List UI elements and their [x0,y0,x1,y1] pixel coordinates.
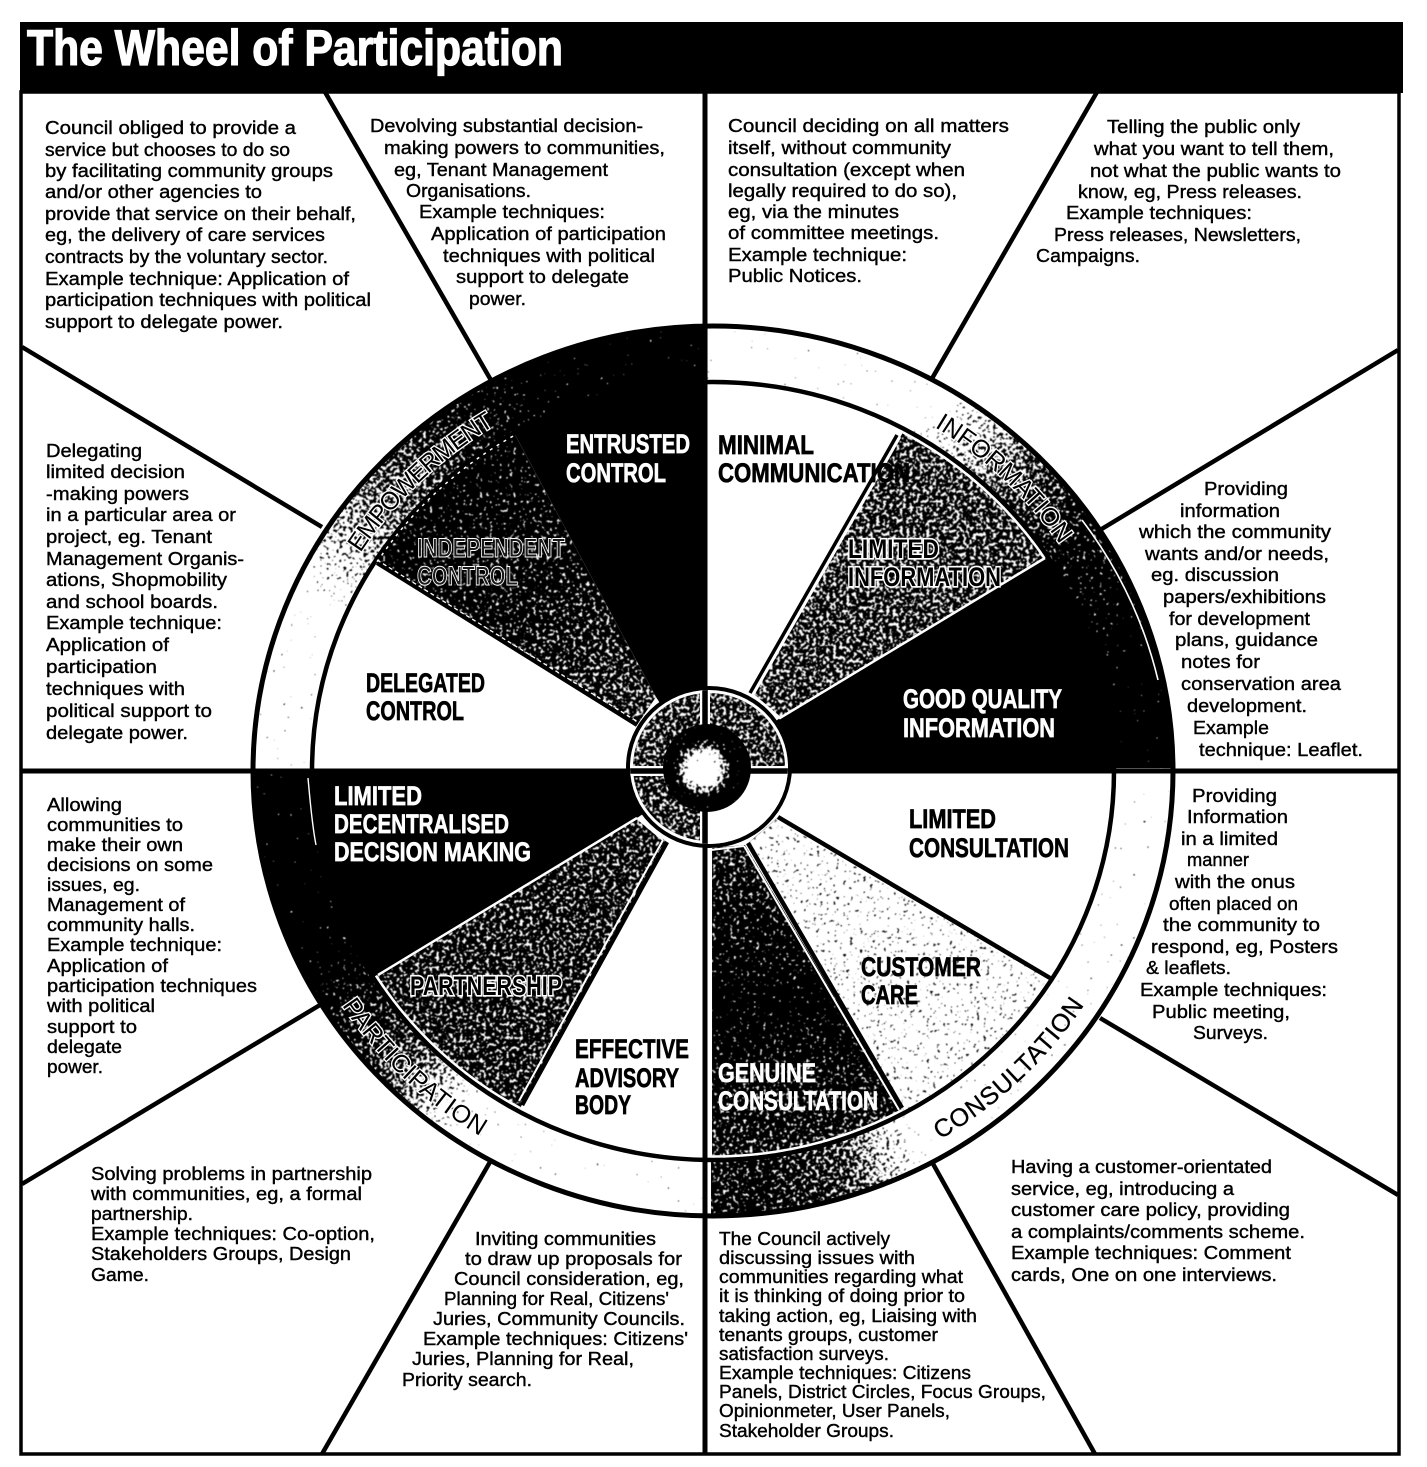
text block: customer-orientated service [1011,1156,1305,1285]
text block: providing information: eg. discussion [1151,564,1279,585]
label: entrusted control: ENTRUSTED [566,429,690,459]
text block: allowing communities [46,794,257,1077]
text block: providing information: plans, guidance [1175,629,1318,650]
text block: devolving substantial powers: making powers to communities, [384,137,665,158]
label: limited consultation: LIMITED [909,804,996,834]
text block: providing information in a limited manner: Example techniques: [1140,979,1327,1000]
text block: delegating limited powers: limited decision [46,461,185,482]
label: limited consultation [909,804,1069,863]
text block: providing information in a limited manner: in a limited [1181,828,1278,849]
text block: providing information [1138,478,1363,760]
text block: providing information: development. [1187,695,1307,716]
text block: solving problems: Solving problems in partnership [91,1163,372,1184]
label: good quality information: GOOD QUALITY [903,684,1062,714]
text block: solving problems: Stakeholders Groups, Design [91,1243,351,1264]
text block: devolving substantial powers: power. [469,288,526,309]
wedge: genuine consultation [712,845,903,1158]
ring: empowerment shading [240,310,705,771]
text block: customer-orientated service: Example techniques: Comment [1011,1242,1291,1263]
label: delegated control: DELEGATED [366,668,485,698]
wedge: good quality information [776,558,1112,768]
text block: delegating limited powers: political support to [46,700,212,721]
text block: council obliged: Example technique: Application of [45,268,350,289]
text block: devolving substantial powers: Example techniques: [419,201,605,222]
label: limited information [848,534,1001,592]
text block: council obliged: contracts by the voluntary sector. [45,246,328,267]
label: effective advisory body: BODY [575,1090,631,1120]
text block: council obliged: and/or other agencies to [45,181,262,202]
text block: telling the public: what you want to tell them, [1093,138,1334,159]
label: limited consultation: CONSULTATION [909,833,1069,863]
text block: devolving substantial powers: Organisations. [406,180,531,201]
text block: devolving substantial powers [370,115,666,309]
label: genuine consultation: GENUINE [718,1058,816,1088]
label: customer care [861,952,981,1010]
text block: telling the public [1036,116,1341,266]
label: delegated control [366,668,485,726]
text block: providing information in a limited manner: manner [1187,849,1249,870]
text block: council deciding: Public Notices. [728,265,862,286]
text block: devolving substantial powers: techniques with political [443,245,655,266]
text block: providing information: which the community [1138,521,1332,542]
text block: providing information in a limited manner: & leaflets. [1146,957,1231,978]
wedge: limited decentralised decision making [314,774,642,976]
text block: inviting communities: Planning for Real, Citizens' [444,1288,669,1309]
text block: council obliged: eg, the delivery of care services [45,224,325,245]
label: good quality information: INFORMATION [903,713,1055,743]
label: minimal communication: COMMUNICATION [718,458,910,488]
text block: allowing communities: with political [46,995,155,1016]
wedge: independent control [376,435,656,725]
text block: providing information: papers/exhibitions [1163,586,1326,607]
label: genuine consultation: CONSULTATION [718,1086,878,1116]
text block: telling the public: know, eg, Press releases. [1078,181,1302,202]
label: limited decentralised decision making: DECENTRALISED [334,809,509,839]
wedge labels [334,429,1069,1120]
text block: council actively discussing [719,1228,1046,1441]
text block: allowing communities: make their own [47,834,183,855]
text block: council actively discussing: it is thinking of doing prior to [719,1285,965,1306]
text block: allowing communities: issues, eg. [47,874,140,895]
text block: customer-orientated service: a complaints/comments scheme. [1011,1221,1305,1242]
text block: inviting communities: Juries, Community Councils. [433,1308,685,1329]
label: independent control: INDEPENDENT [417,533,565,563]
wheel diagram [250,324,1176,1218]
text block: telling the public: Example techniques: [1066,202,1252,223]
text block: council deciding: of committee meetings. [728,222,939,243]
text block: providing information: conservation area [1181,673,1342,694]
text block: customer-orientated service: customer care policy, providing [1011,1199,1290,1220]
label: entrusted control: CONTROL [566,458,666,488]
wheel outlines [253,326,1173,1216]
text block: inviting communities: Example techniques: Citizens' [423,1328,688,1349]
label: limited decentralised decision making: LIMITED [334,781,422,811]
label: customer care: CARE [861,980,918,1010]
ring label: empowerment: EMPOWERMENT [346,409,491,552]
ring label: consultation: CONSULTATION [934,996,1084,1136]
text block: telling the public: Press releases, Newsletters, [1054,224,1301,245]
text block: allowing communities: Application of [47,955,169,976]
label: limited decentralised decision making [334,781,531,867]
label: partnership: PARTNERSHIP [410,971,562,1001]
text block: council deciding: eg, via the minutes [728,201,899,222]
wedge: customer care [748,817,1044,1111]
text block: council obliged: support to delegate power. [45,311,283,332]
text block: providing information in a limited manner: Public meeting, [1152,1001,1290,1022]
text block: devolving substantial powers: Devolving substantial decision- [370,115,643,136]
text block: allowing communities: participation techniques [47,975,257,996]
text block: council actively discussing: Example techniques: Citizens [719,1362,971,1383]
label: limited decentralised decision making: DECISION MAKING [334,837,531,867]
wedge: limited information [754,431,1046,716]
text block: allowing communities: communities to [47,814,183,835]
text block: customer-orientated service: cards, One on one interviews. [1011,1264,1277,1285]
text block: inviting communities: Priority search. [402,1369,532,1390]
text block: council actively discussing: Stakeholder Groups. [719,1420,894,1441]
ring: participation shading [240,771,705,1231]
label: limited information: INFORMATION [848,562,1001,592]
title: The Wheel of Participation [27,20,563,76]
text block: council deciding: Council deciding on all matters [728,115,1009,136]
text block: inviting communities: Juries, Planning for Real, [412,1348,634,1369]
text block: council obliged: service but chooses to do so [45,139,290,160]
text block: allowing communities: decisions on some [47,854,213,875]
text block: delegating limited powers: Delegating [46,440,142,461]
text block: inviting communities: to draw up proposals for [465,1248,682,1269]
text block: council actively discussing: The Council actively [719,1228,891,1249]
text block: delegating limited powers: participation [46,656,157,677]
text block: council actively discussing: communities regarding what [719,1266,963,1287]
text block: telling the public: Campaigns. [1036,245,1140,266]
text block: delegating limited powers: -making powers [46,483,189,504]
text block: council deciding [728,115,1009,286]
text block: council actively discussing: taking action, eg, Liaising with [719,1305,977,1326]
text block: devolving substantial powers: support to delegate [456,266,629,287]
ring: information shading [707,310,1187,771]
ring label: participation: PARTICIPATION [341,995,488,1136]
label: entrusted control [566,429,690,488]
label: effective advisory body [575,1034,689,1120]
text block: council deciding: Example technique: [728,244,907,265]
text block: council obliged: by facilitating community groups [45,160,333,181]
text block: providing information in a limited manner: Providing [1192,785,1277,806]
title bar [20,20,1403,93]
ring: consultation shading [711,768,1187,1231]
text block: providing information: technique: Leaflet. [1199,739,1363,760]
text block: delegating limited powers: in a particular area or [46,504,236,525]
text block: allowing communities: Management of [47,894,186,915]
label: limited information: LIMITED [848,534,939,564]
ring labels [341,409,1084,1136]
text block: council obliged: participation techniques with political [45,289,371,310]
text block: providing information: Example [1193,717,1269,738]
wedge: entrusted control [515,384,702,702]
text block: providing information: information [1180,500,1280,521]
text block: solving problems: with communities, eg, a formal [90,1183,362,1204]
text block: telling the public: Telling the public only [1107,116,1301,137]
text block: council obliged [45,117,371,332]
text block: customer-orientated service: Having a customer-orientated [1011,1156,1272,1177]
text block: allowing communities: delegate [47,1036,122,1057]
text block: delegating limited powers: delegate power. [46,722,188,743]
label: effective advisory body: ADVISORY [575,1063,679,1093]
label: minimal communication [718,430,910,488]
text block: providing information: for development [1169,608,1310,629]
text block: delegating limited powers: techniques with [46,678,185,699]
text block: providing information in a limited manner: Surveys. [1193,1022,1268,1043]
label: genuine consultation [718,1058,878,1116]
text block: providing information: wants and/or needs, [1144,543,1329,564]
text block: delegating limited powers: project, eg. Tenant [46,526,212,547]
text block: providing information in a limited manner: with the onus [1174,871,1295,892]
text block: providing information in a limited manner: Information [1187,806,1288,827]
label: effective advisory body: EFFECTIVE [575,1034,689,1064]
label: minimal communication: MINIMAL [718,430,814,460]
label: delegated control: CONTROL [366,696,464,726]
text block: council obliged: provide that service on their behalf, [45,203,356,224]
label: good quality information [903,684,1062,743]
text block: council obliged: Council obliged to provide a [45,117,297,138]
text block: solving problems [90,1163,375,1285]
text block: council actively discussing: tenants groups, customer [719,1324,938,1345]
ring label: information: INFORMATION [935,412,1075,545]
text block: delegating limited powers: and school boards. [46,591,218,612]
text block: inviting communities [402,1228,688,1390]
text block: council deciding: itself, without community [728,137,952,158]
text block: council actively discussing: discussing issues with [719,1247,915,1268]
wedge: partnership [375,820,667,1110]
text block: delegating limited powers: ations, Shopmobility [46,569,228,590]
text block: allowing communities: community halls. [47,914,195,935]
text block: council actively discussing: Opinionmeter, User Panels, [719,1400,950,1421]
text block: solving problems: Game. [91,1264,149,1285]
label: independent control: CONTROL [417,561,518,591]
text block: inviting communities: Council consideration, eg, [454,1268,684,1289]
text block: delegating limited powers: Management Organis- [46,548,244,569]
text block: customer-orientated service: service, eg, introducing a [1011,1178,1235,1199]
text block: council deciding: consultation (except when [728,159,965,180]
text block: providing information: Providing [1204,478,1288,499]
text block: providing information in a limited manner: often placed on [1169,893,1298,914]
text block: allowing communities: Example technique: [47,934,222,955]
text block: inviting communities: Inviting communities [475,1228,656,1249]
text block: providing information in a limited manner: respond, eg, Posters [1151,936,1338,957]
text block: telling the public: not what the public wants to [1090,160,1341,181]
text block: council actively discussing: Panels, District Circles, Focus Groups, [719,1381,1046,1402]
text block: solving problems: Example techniques: Co-option, [91,1223,375,1244]
central hub [626,686,792,848]
text block: providing information: notes for [1181,651,1260,672]
text block: providing information in a limited manner [1140,785,1338,1043]
text block: devolving substantial powers: Application of participation [431,223,666,244]
label: customer care: CUSTOMER [861,952,981,982]
text block: council actively discussing: satisfaction surveys. [719,1343,889,1364]
text block: allowing communities: support to [47,1016,137,1037]
text block: devolving substantial powers: eg, Tenant Management [394,159,608,180]
text block: delegating limited powers [46,440,244,743]
text block: solving problems: partnership. [91,1203,193,1224]
text block: council deciding: legally required to do so), [728,180,957,201]
text block: allowing communities: Allowing [47,794,122,815]
label: independent control [417,533,565,591]
text block: allowing communities: power. [47,1056,103,1077]
text block: providing information in a limited manner: the community to [1163,914,1320,935]
text block: delegating limited powers: Example technique: [46,612,222,633]
text block: delegating limited powers: Application of [46,634,170,655]
